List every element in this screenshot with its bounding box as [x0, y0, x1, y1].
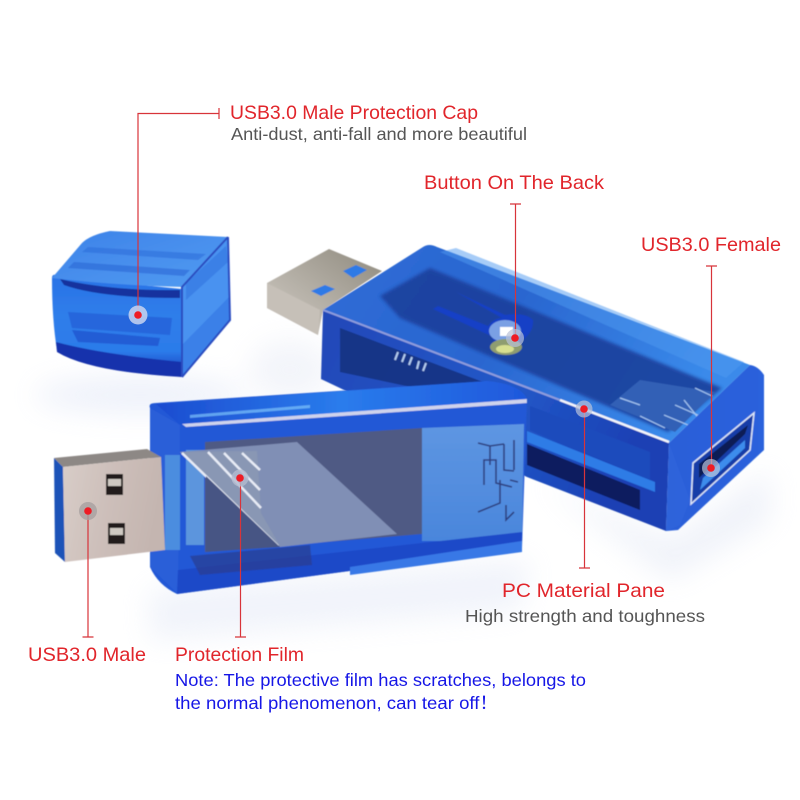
- heading: button: Button On The Back: [424, 172, 604, 194]
- marker: cap: [128, 306, 148, 324]
- leader: cap: [138, 108, 219, 315]
- rear male plug: [267, 249, 382, 335]
- USB protection cap: [52, 231, 230, 377]
- rear device top face: [323, 245, 750, 443]
- leader: button: [510, 204, 521, 338]
- floor shadows: [35, 340, 770, 640]
- marker: male: [79, 502, 97, 520]
- rear device side face: [321, 310, 669, 531]
- front device body: [150, 381, 527, 594]
- front right light panel: [422, 424, 524, 541]
- description: cap: Anti-dust, anti-fall and more beautiful: [231, 124, 527, 144]
- cap rim: [182, 237, 230, 377]
- USB3.0 male plug: [54, 449, 165, 562]
- marker: button: [506, 329, 524, 347]
- note text: [175, 670, 586, 713]
- rear USB device: [267, 245, 764, 531]
- display digits reflection: [395, 352, 426, 371]
- callout: PC material pane: [465, 400, 705, 626]
- heading: female: USB3.0 Female: [641, 234, 781, 256]
- leader: male: [82, 511, 94, 637]
- note text: Note: The protective film has scratches, belongs to: [175, 670, 586, 690]
- rear device end face: [666, 365, 764, 531]
- front bottom strip: [177, 532, 522, 594]
- display dark background: [205, 428, 422, 552]
- front USB device: [54, 381, 527, 594]
- leader: film: [235, 478, 246, 637]
- marker: film: [232, 470, 248, 486]
- callout: USB3.0 male protection cap: [128, 102, 527, 324]
- front top strip: [156, 381, 527, 425]
- leader: female: [706, 266, 717, 468]
- note text: the normal phenomenon, can tear off！: [175, 693, 498, 713]
- circuit board: [380, 268, 722, 432]
- description: pane: High strength and toughness: [465, 606, 705, 626]
- heading: male: USB3.0 Male: [28, 644, 146, 666]
- cap lower inner ridges: [68, 312, 172, 335]
- heading: film: Protection Film: [175, 644, 304, 666]
- marker: pane: [576, 400, 592, 418]
- protection film: [180, 442, 397, 552]
- plug holes: [106, 474, 123, 495]
- side highlight: [323, 310, 560, 400]
- button on the back: [433, 292, 533, 355]
- callout: protection film: [175, 470, 586, 713]
- marker: female: [702, 459, 720, 477]
- callout: USB3.0 male: [28, 502, 146, 666]
- heading: pane: PC Material Pane: [502, 580, 665, 602]
- cap right inner side: [182, 237, 230, 377]
- cap top face: [52, 231, 228, 287]
- cap front face: [52, 275, 182, 377]
- leader: pane: [579, 409, 590, 568]
- front right traces: [478, 440, 518, 520]
- heading: cap: USB3.0 Male Protection Cap: [230, 102, 478, 124]
- board traces: [620, 388, 712, 432]
- USB female port: [691, 413, 754, 504]
- front left end: [150, 408, 180, 594]
- callout: button on the back: [424, 172, 604, 347]
- rear plug holes: [311, 285, 335, 296]
- callout: USB3.0 female: [641, 234, 781, 477]
